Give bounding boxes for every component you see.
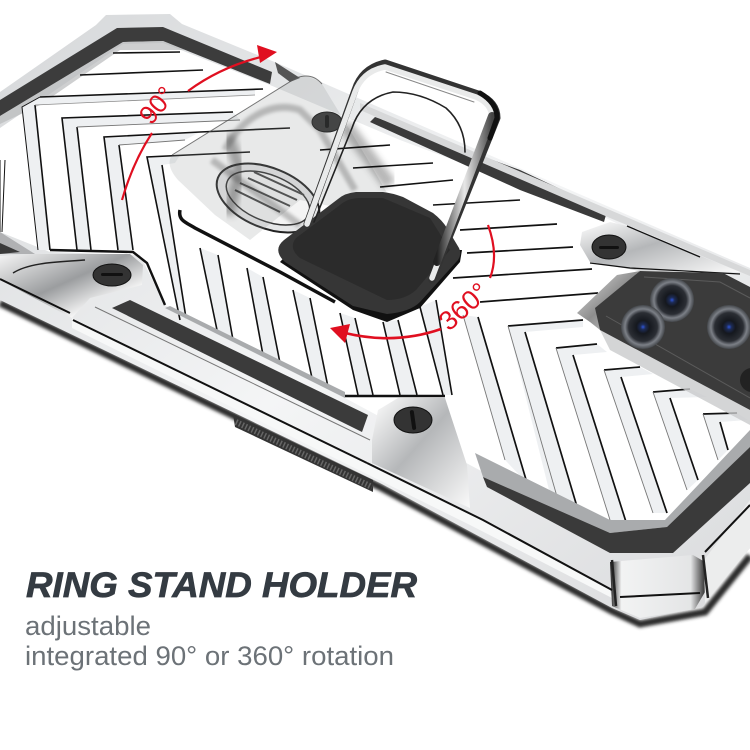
label 360: 360° <box>433 277 495 336</box>
ring frame <box>307 63 497 280</box>
panel outline <box>50 250 445 396</box>
centre bottom screw pad <box>372 398 470 508</box>
screw: bottom centre <box>394 407 432 433</box>
side button <box>233 414 373 492</box>
lower rim highlight <box>72 318 612 598</box>
left and middle ribs <box>0 52 452 395</box>
360 degree arrow <box>330 225 495 343</box>
right ribs <box>453 224 748 526</box>
left screw pad <box>0 232 143 318</box>
title: RING STAND HOLDER <box>26 566 418 605</box>
case bottom shadow edge <box>0 303 750 624</box>
lens 1 <box>650 278 694 322</box>
lower gray shadow strips <box>165 306 750 533</box>
lens 2 <box>621 305 665 349</box>
top-right dark band <box>370 117 607 222</box>
lens 3 <box>707 305 750 349</box>
top-left dark band <box>0 27 272 116</box>
bottom corner bumper <box>610 555 705 618</box>
base shadow <box>280 240 462 322</box>
90 degree arrow <box>122 45 277 200</box>
screw: right <box>592 235 626 259</box>
ring stand <box>170 63 520 322</box>
lens 4 <box>740 368 750 392</box>
screw: left <box>93 264 131 286</box>
oval plate centre <box>207 150 329 246</box>
metal base plate <box>180 160 450 312</box>
camera silver surround <box>577 271 750 425</box>
camera module <box>595 271 750 410</box>
right screw pad <box>580 222 740 274</box>
top rim notch <box>275 62 300 82</box>
lower right dark band <box>483 447 750 553</box>
rim black seam lines <box>0 279 750 597</box>
translucent ghost ring <box>170 76 520 240</box>
label 90: 90° <box>133 80 181 130</box>
white main panel <box>0 43 750 530</box>
top screw <box>312 112 342 132</box>
subtitle line 1: adjustable <box>25 611 151 641</box>
subtitle line 2: integrated 90° or 360° rotation <box>25 641 394 671</box>
lower left dark strip <box>112 300 368 432</box>
black square base <box>278 192 460 314</box>
